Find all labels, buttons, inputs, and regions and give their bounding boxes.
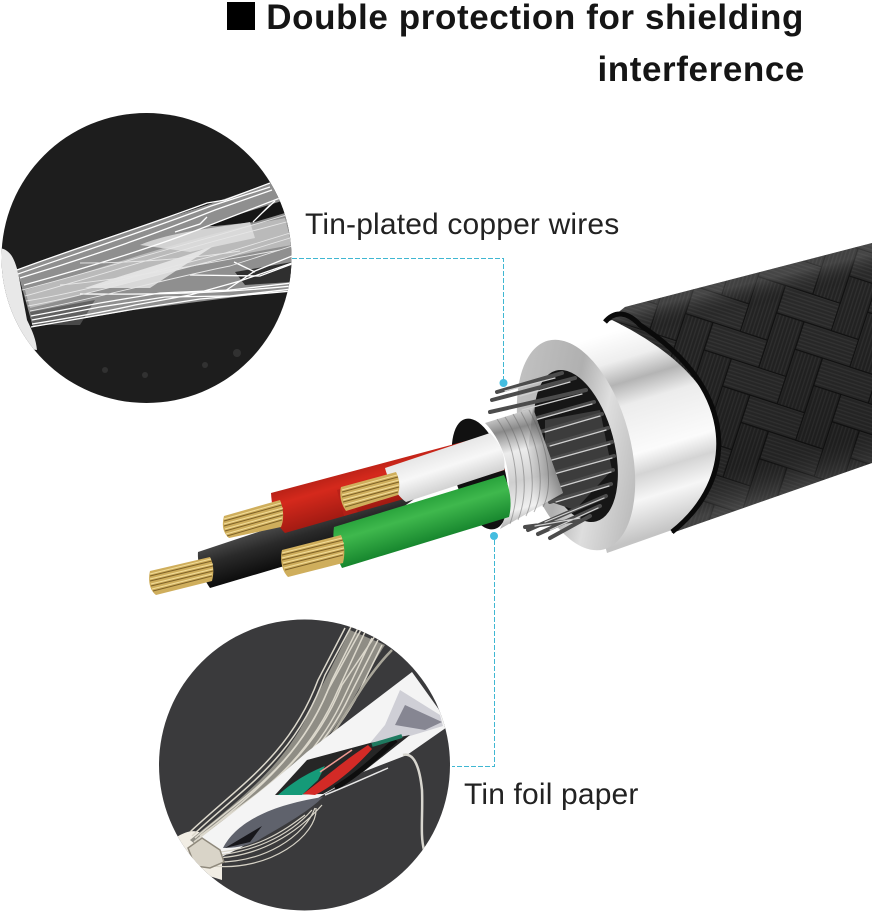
green wire xyxy=(333,475,511,568)
photo circle: tin-plated copper wires xyxy=(0,110,295,406)
copper conductor: red wire xyxy=(223,500,283,538)
copper conductor: black wire xyxy=(149,557,213,595)
dark opening of foil sleeve xyxy=(441,412,519,536)
label: tin-plated copper wires: Tin-plated copper wires xyxy=(305,208,619,241)
callout leader: tin foil paper xyxy=(452,532,498,766)
fanned shield wires xyxy=(490,373,614,538)
jacket rim xyxy=(605,314,719,532)
white inner sleeve xyxy=(551,320,721,553)
copper conductor: white wire xyxy=(340,472,399,511)
callout leader: tin-plated copper wires xyxy=(292,258,508,387)
ring opening xyxy=(519,361,633,531)
icon: title square xyxy=(227,2,255,30)
photo circle: tin foil paper xyxy=(155,615,455,913)
black wire xyxy=(198,495,420,588)
silver end ring xyxy=(496,327,656,563)
braided black jacket xyxy=(606,243,872,533)
white wire xyxy=(385,433,504,502)
heading line 2: interference xyxy=(597,50,805,89)
red wire xyxy=(271,437,505,533)
cable illustration xyxy=(149,243,872,595)
label: tin foil paper: Tin foil paper xyxy=(464,778,639,811)
copper conductor: green wire xyxy=(281,535,344,577)
foil shield sleeve xyxy=(485,408,563,529)
